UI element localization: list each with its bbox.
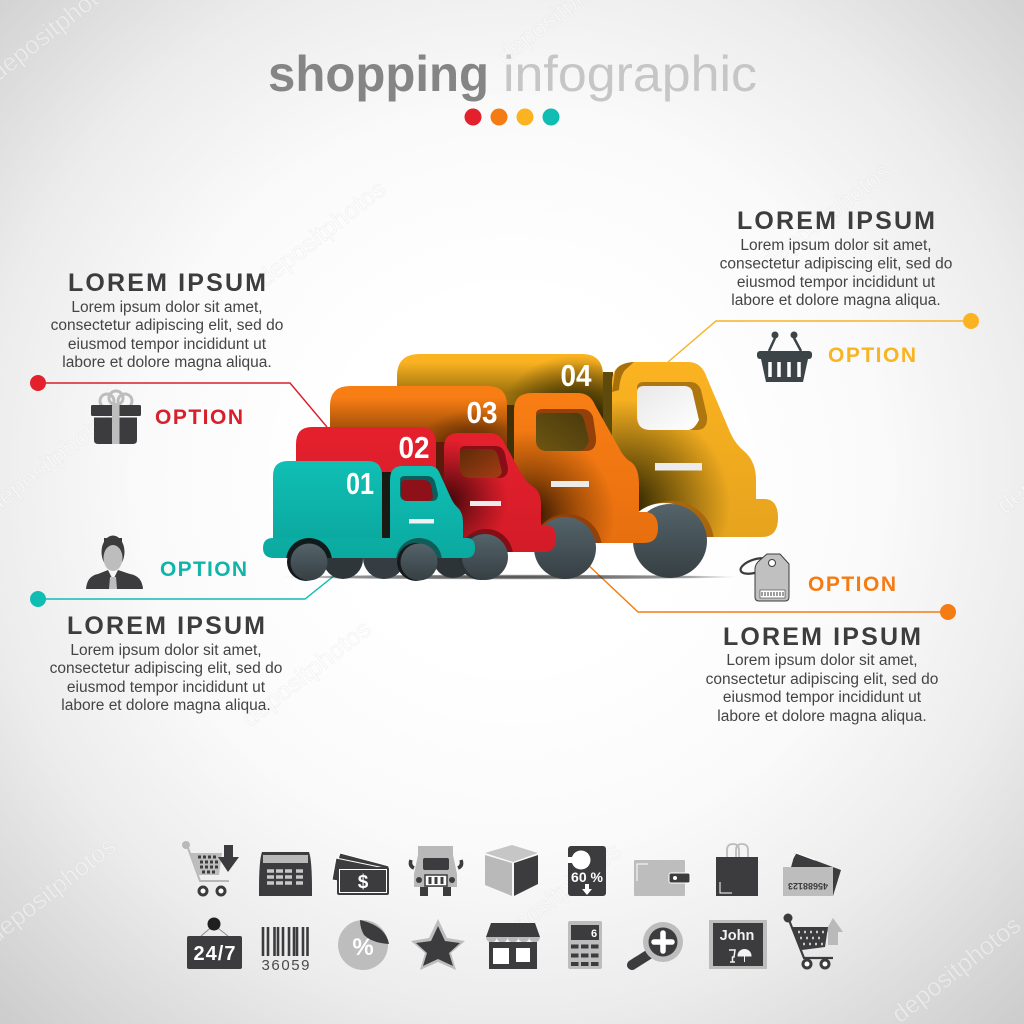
text block: bottom right: consectetur adipiscing elit, sed do <box>706 671 938 688</box>
icon: barcode <box>262 927 310 974</box>
icon: card: 45688123 <box>788 881 828 891</box>
text block: left top: Lorem ipsum dolor sit amet, <box>71 299 263 316</box>
watermark: depositphotos <box>251 175 391 293</box>
icon: 24/7 sign: 24/7 <box>194 943 236 965</box>
text block: left top: labore et dolore magna aliqua. <box>62 354 272 371</box>
option labels: OPTION <box>828 344 916 367</box>
text block: top right: consectetur adipiscing elit, sed do <box>720 256 952 272</box>
title colour dots <box>464 108 560 126</box>
icon: wallet <box>634 860 690 896</box>
icon: cash register <box>259 852 312 896</box>
text block: top right: Lorem ipsum dolor sit amet, <box>740 237 932 254</box>
truck 01 teal <box>263 461 475 584</box>
icon: 24/7 sign <box>187 918 242 969</box>
text block: left top <box>51 269 283 371</box>
icon: shopping basket <box>757 332 812 382</box>
text block: left bottom: labore et dolore magna aliqua. <box>61 697 271 714</box>
connector line: orange <box>585 562 956 620</box>
icon: percent sticker: % <box>352 934 374 961</box>
watermark: depositphotos <box>486 837 626 955</box>
icon: card <box>783 853 841 896</box>
icon: banknotes <box>332 853 389 895</box>
title: infographic <box>503 46 757 102</box>
truck 02 red: 02 <box>398 430 430 465</box>
text block: left bottom <box>50 612 282 714</box>
connector line: teal <box>30 555 360 607</box>
title <box>268 46 757 102</box>
connector line: yellow <box>668 313 979 362</box>
text block: left bottom: Lorem ipsum dolor sit amet, <box>70 642 262 659</box>
text block: bottom right: labore et dolore magna aliqua. <box>717 708 927 725</box>
icon: gift <box>91 391 141 444</box>
icon: calculator: 6 <box>591 928 597 940</box>
title: shopping <box>268 46 489 102</box>
text block: top right: labore et dolore magna aliqua. <box>731 292 941 309</box>
icon: price tag <box>739 554 789 601</box>
connector line: red <box>30 375 327 427</box>
icon: star <box>411 919 465 970</box>
icon: calculator <box>568 921 602 969</box>
icon: percent sticker <box>338 920 389 970</box>
icon row 1 <box>182 841 841 896</box>
icon: shopping bag <box>716 844 758 896</box>
text block: left top: eiusmod tempor incididunt ut <box>68 336 267 353</box>
icon: barcode: 36059 <box>262 957 310 974</box>
truck 03 orange: 03 <box>466 395 498 430</box>
icon: John parcel label <box>709 920 767 969</box>
ground shadow <box>282 574 738 580</box>
text block: left bottom: eiusmod tempor incididunt ut <box>67 679 266 696</box>
text block: top right: eiusmod tempor incididunt ut <box>737 274 936 291</box>
text block: bottom right: LOREM IPSUM <box>723 623 921 651</box>
icon: store <box>486 923 540 969</box>
option labels: OPTION <box>808 573 896 596</box>
watermark: depositphotos <box>756 157 896 275</box>
option labels: OPTION <box>155 406 243 429</box>
text block: bottom right: Lorem ipsum dolor sit amet, <box>726 652 918 669</box>
truck 04 yellow <box>397 354 778 585</box>
icon: magnifier <box>632 922 683 965</box>
text block: top right: LOREM IPSUM <box>737 207 935 235</box>
watermark: depositphotos <box>236 615 376 733</box>
icon: door hanger 60% <box>568 846 606 896</box>
icon: cart with up arrow <box>784 914 843 968</box>
text block: left bottom: LOREM IPSUM <box>67 612 265 640</box>
truck 01 teal: 01 <box>346 466 374 501</box>
truck 03 orange <box>330 386 658 584</box>
text block: bottom right <box>706 623 938 725</box>
icon: John parcel label: John <box>720 928 754 944</box>
text block: left bottom: consectetur adipiscing elit, sed do <box>50 660 282 677</box>
icon: banknotes: $ <box>358 872 369 893</box>
text block: left top: consectetur adipiscing elit, sed do <box>51 317 283 334</box>
text block: left top: LOREM IPSUM <box>68 269 266 297</box>
text block: top right <box>720 207 952 309</box>
truck 04 yellow: 04 <box>560 358 592 393</box>
icon: businessman <box>86 536 143 589</box>
option labels <box>155 344 916 596</box>
truck 02 red <box>296 427 556 583</box>
text block: bottom right: eiusmod tempor incididunt ut <box>723 689 922 706</box>
option labels: OPTION <box>160 558 247 581</box>
icon: cart with down arrow <box>182 841 239 895</box>
icon row 2 <box>187 914 843 974</box>
icon: door hanger 60%: 60 % <box>571 869 604 885</box>
icon: truck front <box>410 846 462 896</box>
icon: box <box>485 845 538 896</box>
